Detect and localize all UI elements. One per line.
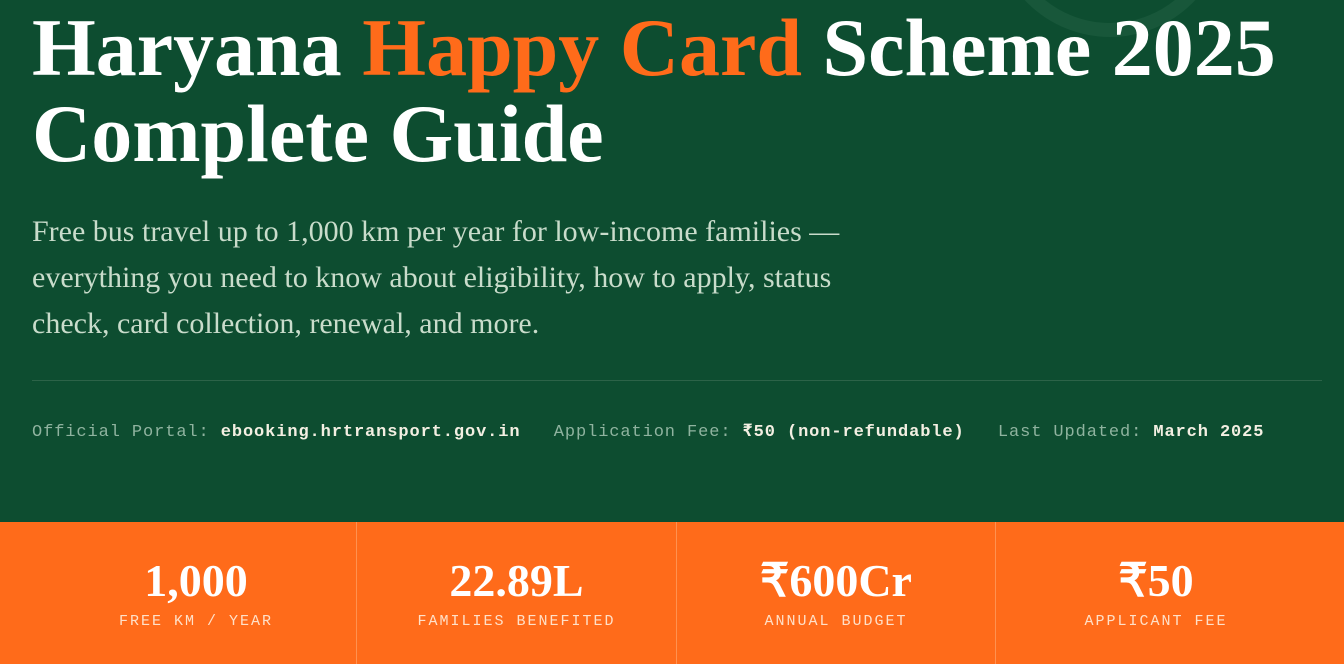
stat: budget: ₹600Cr xyxy=(760,555,912,606)
title: Complete Guide xyxy=(32,88,604,179)
subtitle: Free bus travel up to 1,000 km per year for low-income families — everything you need to know about eligibility, how to apply, status check, card collection, renewal, and more. xyxy=(32,215,839,340)
stat: fee xyxy=(1084,555,1228,630)
stat: families xyxy=(417,555,616,630)
title xyxy=(32,2,1276,179)
stat: budget xyxy=(760,555,912,630)
decorative ring xyxy=(1025,0,1195,37)
stat: free km xyxy=(119,555,273,630)
stat: families: FAMILIES BENEFITED xyxy=(417,613,616,630)
stat: free km: 1,000 xyxy=(144,555,248,606)
stat: fee: APPLICANT FEE xyxy=(1084,613,1228,630)
title: Haryana Happy Card Scheme 2025 xyxy=(32,2,1276,93)
stat: budget: ANNUAL BUDGET xyxy=(764,613,908,630)
stat: free km: FREE KM / YEAR xyxy=(119,613,273,630)
stat: families: 22.89L xyxy=(449,555,584,606)
stat: fee: ₹50 xyxy=(1118,555,1194,606)
meta info line: Official Portal: ebooking.hrtransport.gov.in Application Fee: ₹50 (non-refundable) Last Updated: March 2025 xyxy=(32,423,1264,442)
stats bar xyxy=(0,522,1344,664)
